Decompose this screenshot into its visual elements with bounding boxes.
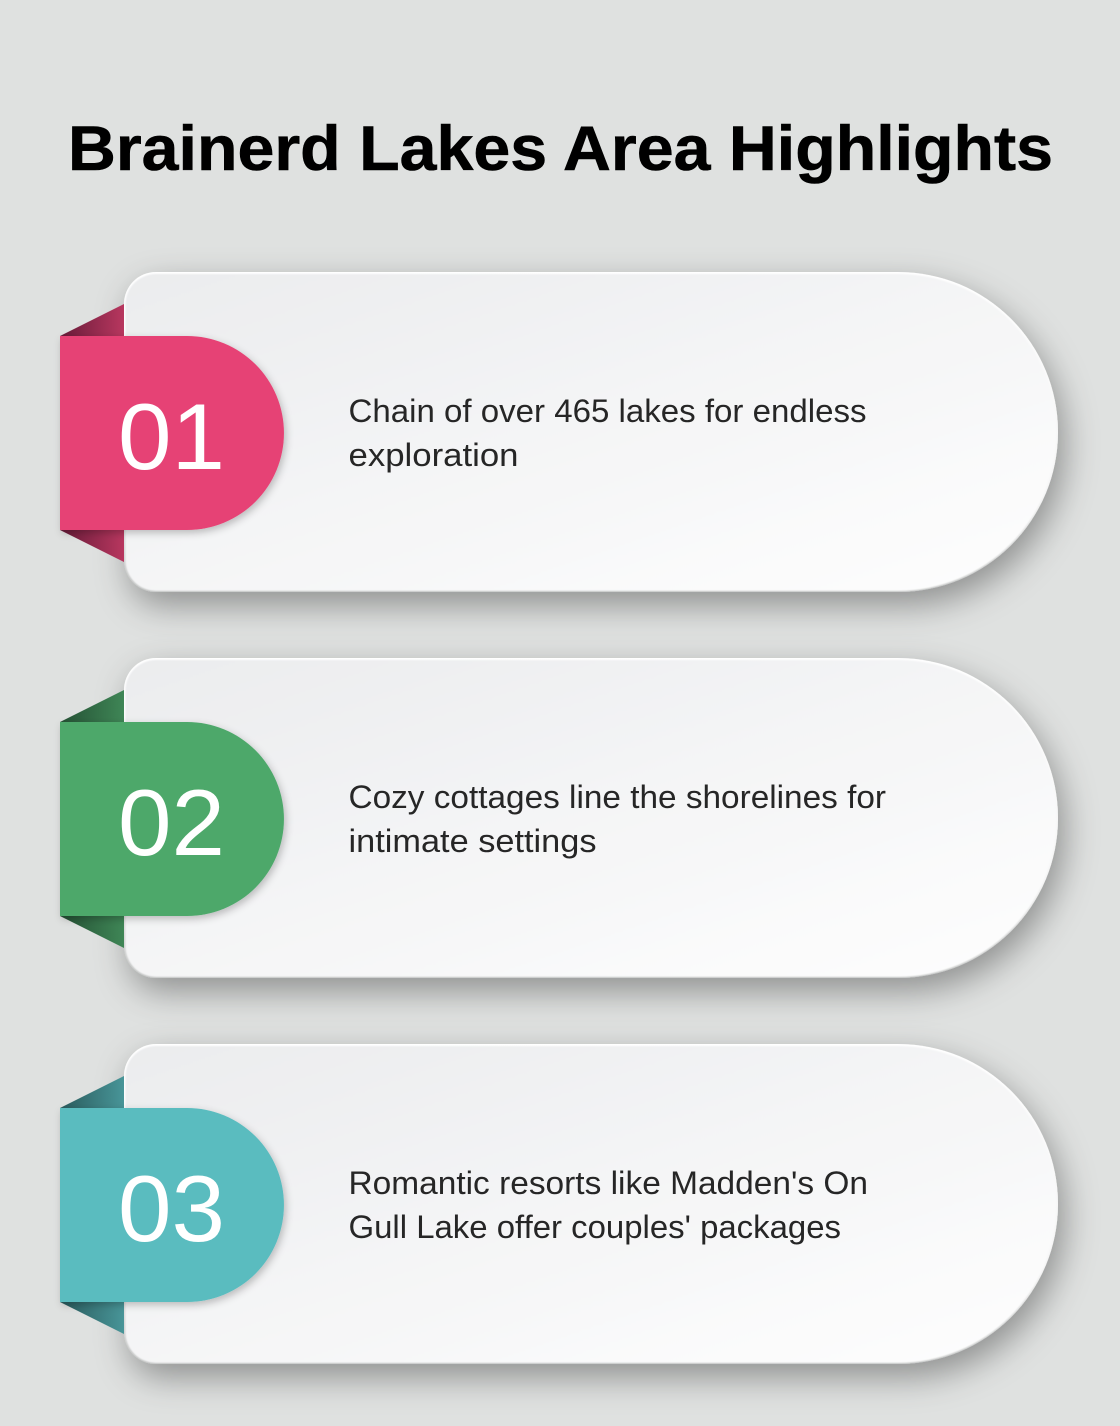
top fold 01 — [60, 304, 124, 336]
title: Brainerd Lakes Area Highlights — [68, 114, 1053, 184]
number 02: 02 — [118, 770, 225, 875]
number badge 03 — [60, 1108, 284, 1302]
bottom fold 02 — [60, 916, 124, 948]
panel: highlight 01 — [60, 272, 1058, 592]
card 02 background — [124, 658, 1058, 978]
number badge 01 — [60, 336, 284, 530]
panel: highlight 02 — [60, 658, 1058, 978]
number 03: 03 — [118, 1156, 225, 1261]
card 01 background — [124, 272, 1058, 592]
number badge 02 — [60, 722, 284, 916]
description 03: Romantic resorts like Madden's On — [348, 1165, 868, 1201]
description 02: intimate settings — [348, 823, 596, 859]
description 01: exploration — [348, 437, 518, 473]
description 01: Chain of over 465 lakes for endless — [348, 393, 866, 429]
top fold 03 — [60, 1076, 124, 1108]
card 03 background — [124, 1044, 1058, 1364]
number 01: 01 — [118, 384, 225, 489]
description 02: Cozy cottages line the shorelines for — [348, 779, 886, 815]
bottom fold 01 — [60, 530, 124, 562]
top fold 02 — [60, 690, 124, 722]
panel: highlight 03 — [60, 1044, 1058, 1364]
description 03: Gull Lake offer couples' packages — [348, 1209, 841, 1245]
bottom fold 03 — [60, 1302, 124, 1334]
